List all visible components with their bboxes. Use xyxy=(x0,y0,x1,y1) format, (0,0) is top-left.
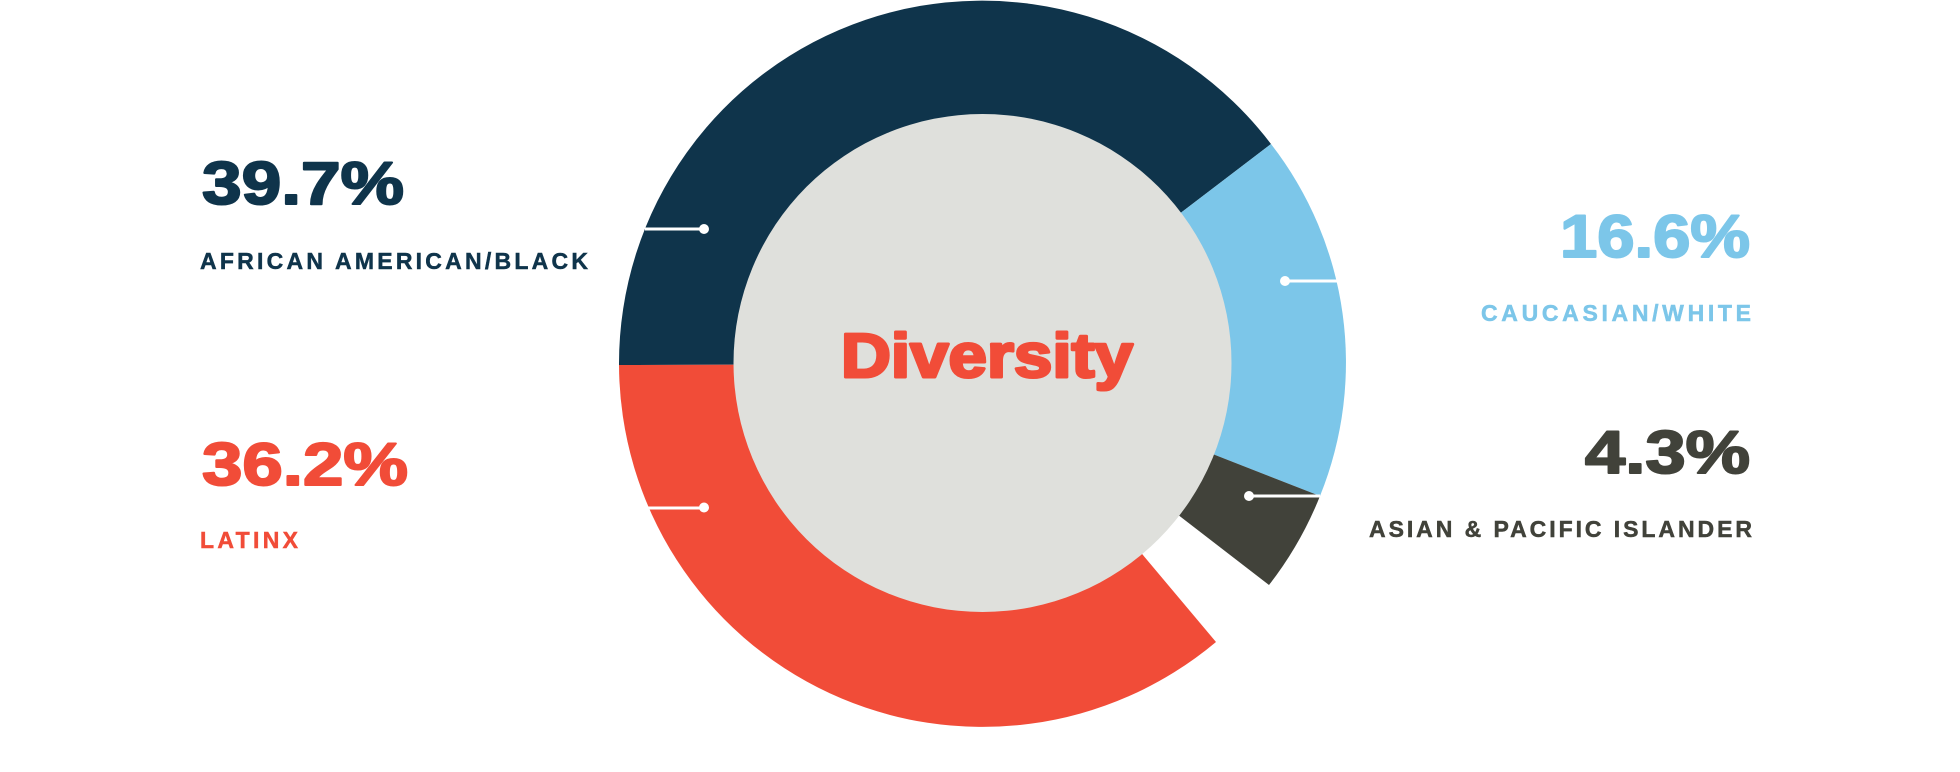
pointer: Asian & Pacific Islander xyxy=(1244,491,1320,501)
segment: Caucasian/White xyxy=(982,144,1346,496)
stat: African American/Black xyxy=(200,150,588,274)
segment: Latinx xyxy=(619,364,1216,727)
pointer: Latinx xyxy=(645,502,709,512)
center circle xyxy=(734,114,1232,612)
value: 39.7% xyxy=(202,150,404,217)
label: AFRICAN AMERICAN/BLACK xyxy=(200,248,588,274)
segment: African American/Black xyxy=(619,1,1271,365)
value: 36.2% xyxy=(202,431,408,498)
value: 4.3% xyxy=(1585,419,1750,486)
stat: Caucasian/White xyxy=(1481,203,1751,326)
pointer: African American/Black xyxy=(645,224,709,234)
segment: Asian & Pacific Islander xyxy=(982,364,1320,585)
stat: Latinx xyxy=(200,431,408,553)
stat: Asian & Pacific Islander xyxy=(1369,419,1752,542)
donut chart xyxy=(619,1,1346,727)
label: ASIAN & PACIFIC ISLANDER xyxy=(1369,516,1752,542)
pointer: Caucasian/White xyxy=(1280,276,1339,286)
value: 16.6% xyxy=(1560,203,1750,270)
label: CAUCASIAN/WHITE xyxy=(1481,300,1751,326)
center title: Diversity xyxy=(841,322,1134,391)
label: LATINX xyxy=(200,527,299,553)
